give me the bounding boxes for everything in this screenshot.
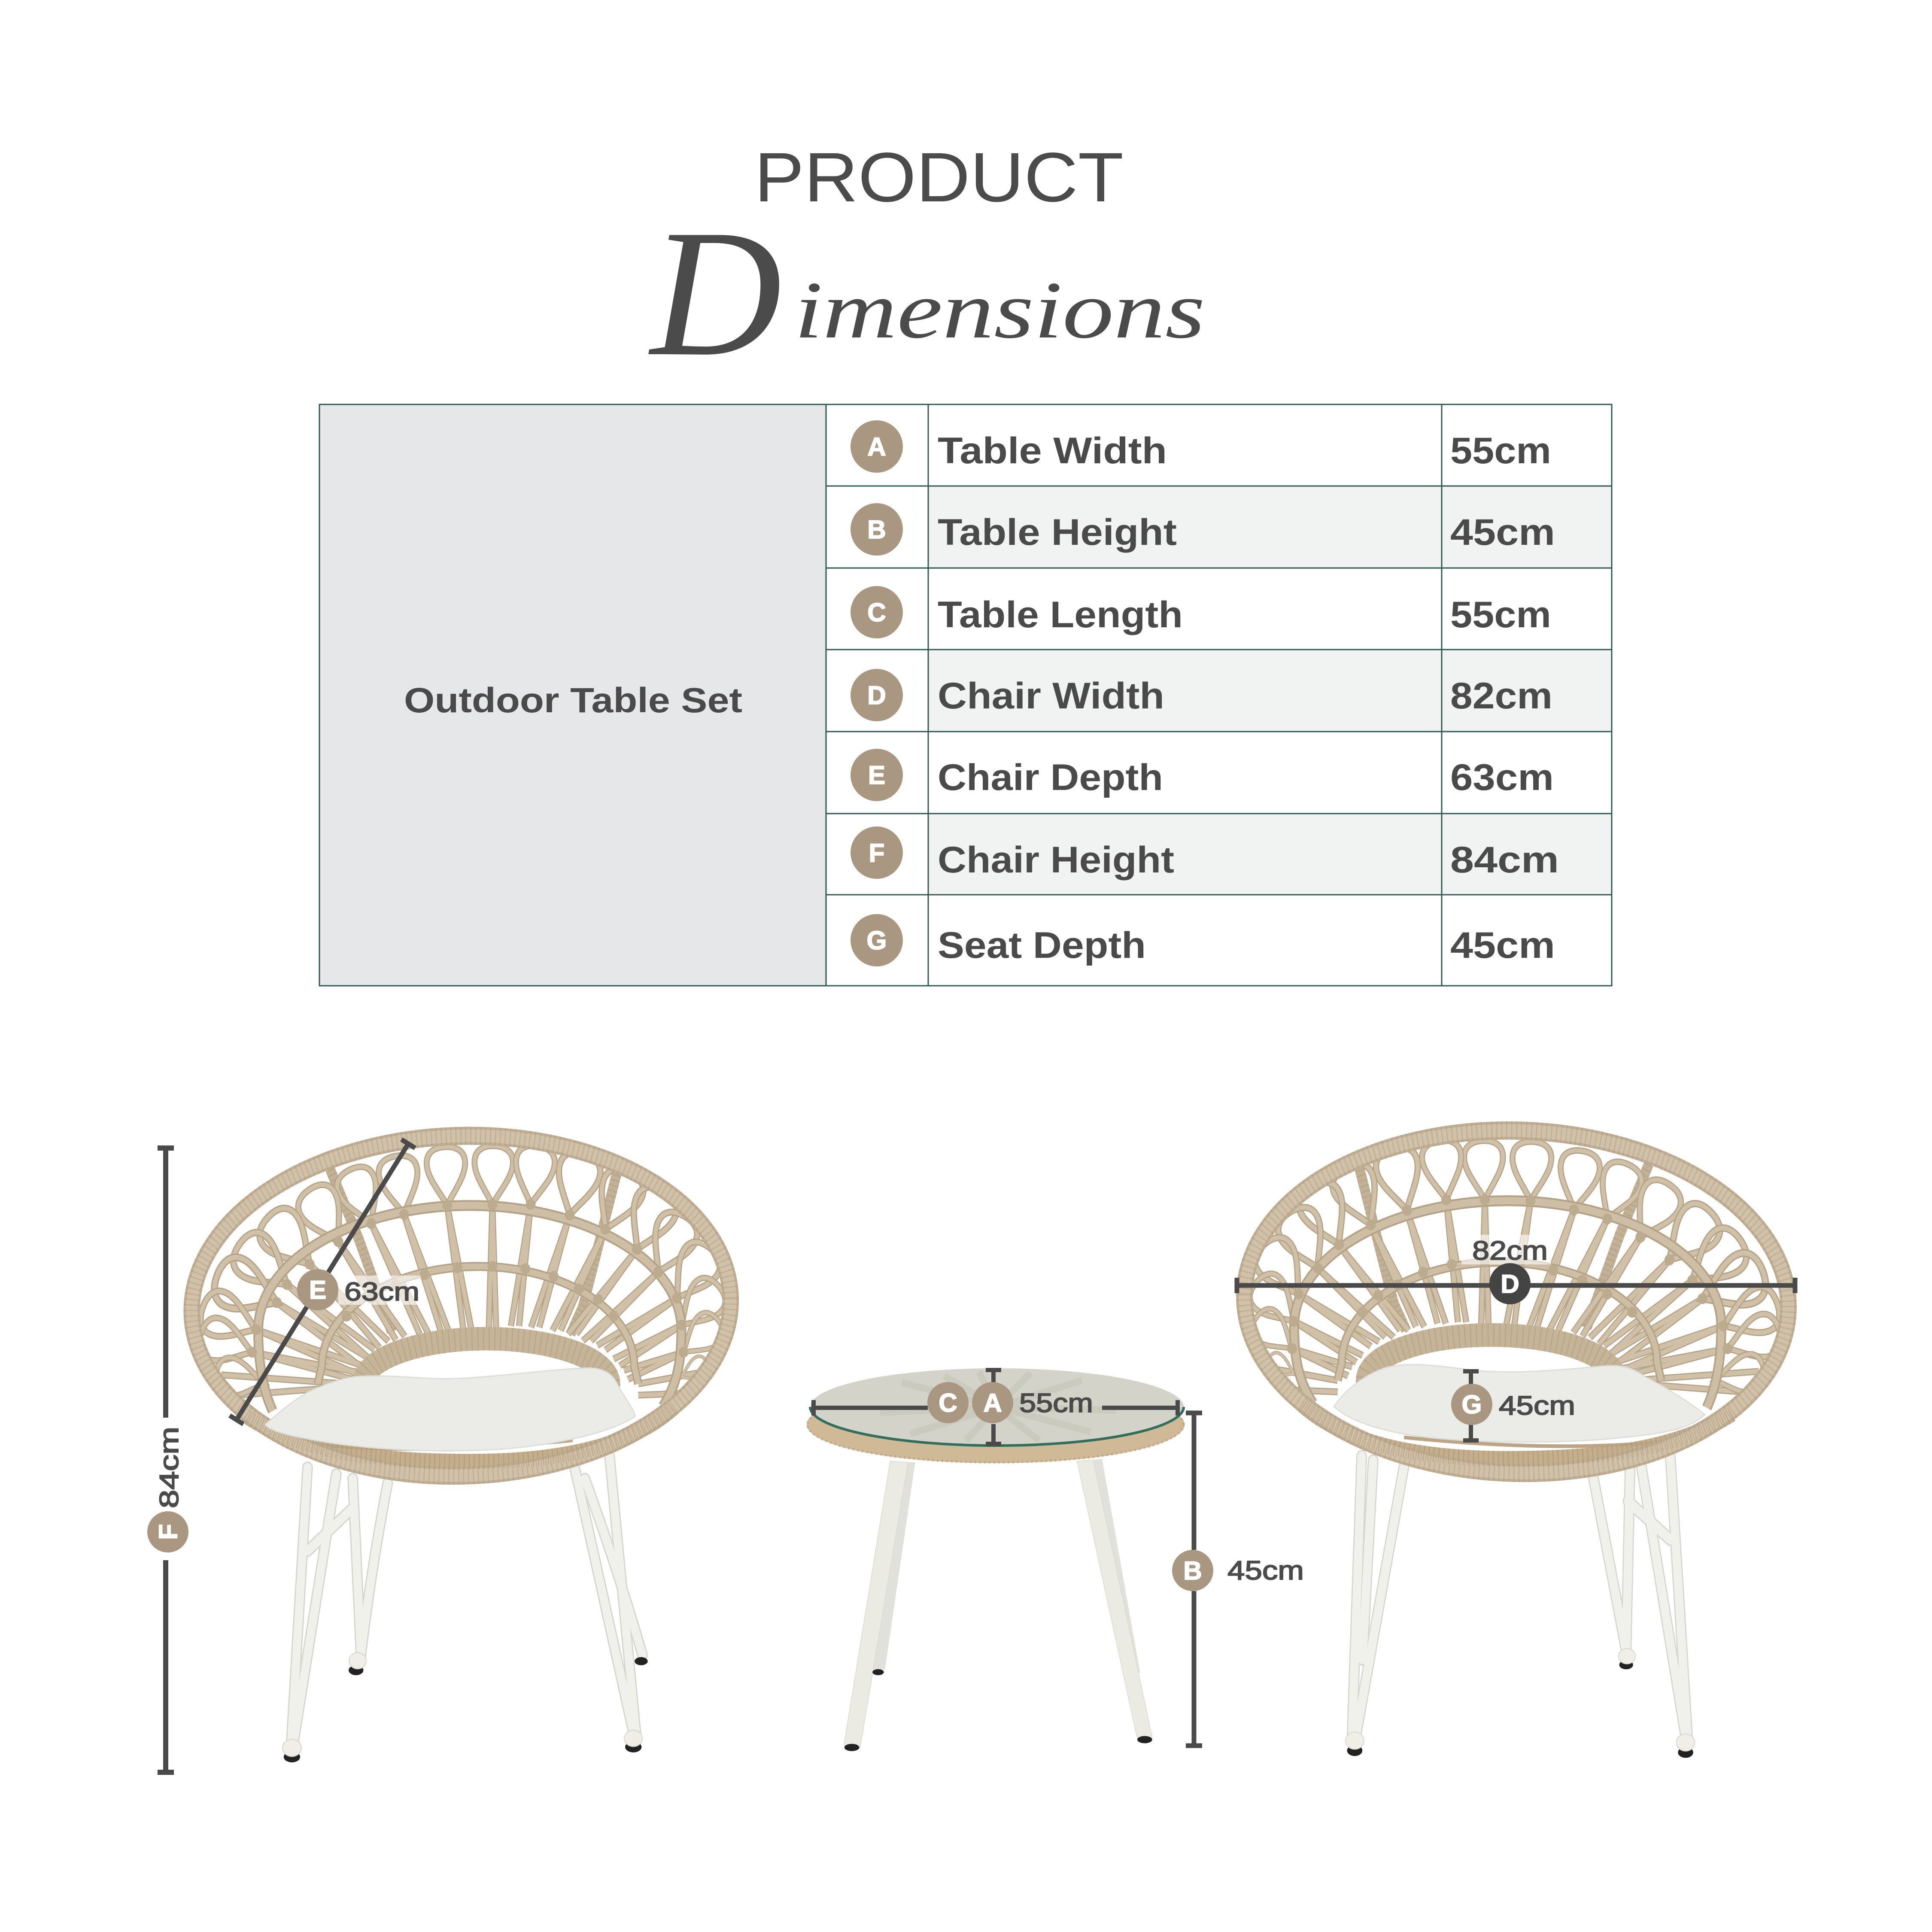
row E (851, 749, 1554, 801)
panel: product name cell (319, 404, 826, 986)
heading: PRODUCT: PRODUCT (754, 138, 1124, 216)
row F (851, 826, 1559, 881)
dimension E: chair depth (230, 1139, 421, 1424)
table glass top (810, 1368, 1184, 1446)
row E: 63cm (1450, 757, 1554, 798)
left chair (188, 1128, 735, 1762)
row A: Table Width (938, 430, 1167, 471)
row D: 82cm (1450, 675, 1552, 717)
left chair wicker frame (188, 1128, 735, 1483)
row C (851, 586, 1551, 638)
dimension F: chair height: 84cm (155, 1427, 184, 1508)
dimensions A and C: table width and length: 55cm (1019, 1388, 1093, 1418)
heading: Dimensions script: imensions (794, 265, 1205, 355)
row E: Chair Depth (938, 757, 1163, 798)
dimensions A and C: table width and length: C (939, 1388, 957, 1417)
right chair wicker frame (1240, 1123, 1792, 1481)
row B: 45cm (1450, 512, 1555, 553)
dimension D: chair width: 82cm (1472, 1236, 1548, 1266)
right chair cushion (1334, 1364, 1705, 1442)
right chair legs (1346, 1456, 1695, 1758)
dimension G: seat depth: 45cm (1499, 1391, 1575, 1421)
dimensions A and C: table width and length: A (983, 1388, 1002, 1417)
dimension G: seat depth (1451, 1371, 1575, 1440)
row F: Chair Height (938, 839, 1174, 881)
row A (851, 420, 1551, 473)
dimension B: table height: B (1183, 1556, 1202, 1585)
row A: A (867, 432, 886, 461)
panel: product name cell: Outdoor Table Set (404, 681, 742, 720)
dimension F: chair height (147, 1148, 188, 1772)
left chair legs (283, 1456, 648, 1762)
dimension E: chair depth: 63cm (344, 1277, 419, 1306)
title (647, 138, 1205, 394)
heading: Dimensions script: D (647, 192, 782, 394)
dimensions table (319, 404, 1612, 986)
row D: D (867, 681, 886, 710)
dimension B: table height (1172, 1413, 1304, 1746)
row C: C (867, 598, 886, 627)
row A: 55cm (1450, 430, 1551, 471)
dimension D: chair width (1237, 1235, 1795, 1304)
table legs (844, 1459, 1152, 1751)
dimensions A and C: table width and length (814, 1370, 1178, 1444)
dimension B: table height: 45cm (1227, 1556, 1304, 1586)
row G: G (867, 926, 887, 955)
row B (851, 503, 1555, 556)
row G (851, 914, 1555, 966)
row B: B (867, 515, 886, 544)
row G: Seat Depth (938, 925, 1146, 966)
row D (851, 669, 1552, 721)
row D: Chair Width (938, 675, 1164, 717)
row E: E (868, 761, 885, 790)
table rim (807, 1386, 1185, 1463)
left chair cushion (265, 1368, 635, 1451)
row C: Table Length (938, 594, 1183, 635)
dimension E: chair depth: E (309, 1276, 326, 1304)
row B: Table Height (938, 512, 1177, 553)
dimension G: seat depth: G (1462, 1390, 1482, 1419)
dimension F: chair height: F (154, 1524, 182, 1540)
row G: 45cm (1450, 925, 1555, 966)
row F: 84cm (1450, 839, 1559, 881)
dimension D: chair width: D (1501, 1270, 1519, 1298)
row C: 55cm (1450, 594, 1551, 635)
table (807, 1368, 1185, 1751)
right chair (1240, 1123, 1792, 1758)
row F: F (869, 838, 884, 867)
